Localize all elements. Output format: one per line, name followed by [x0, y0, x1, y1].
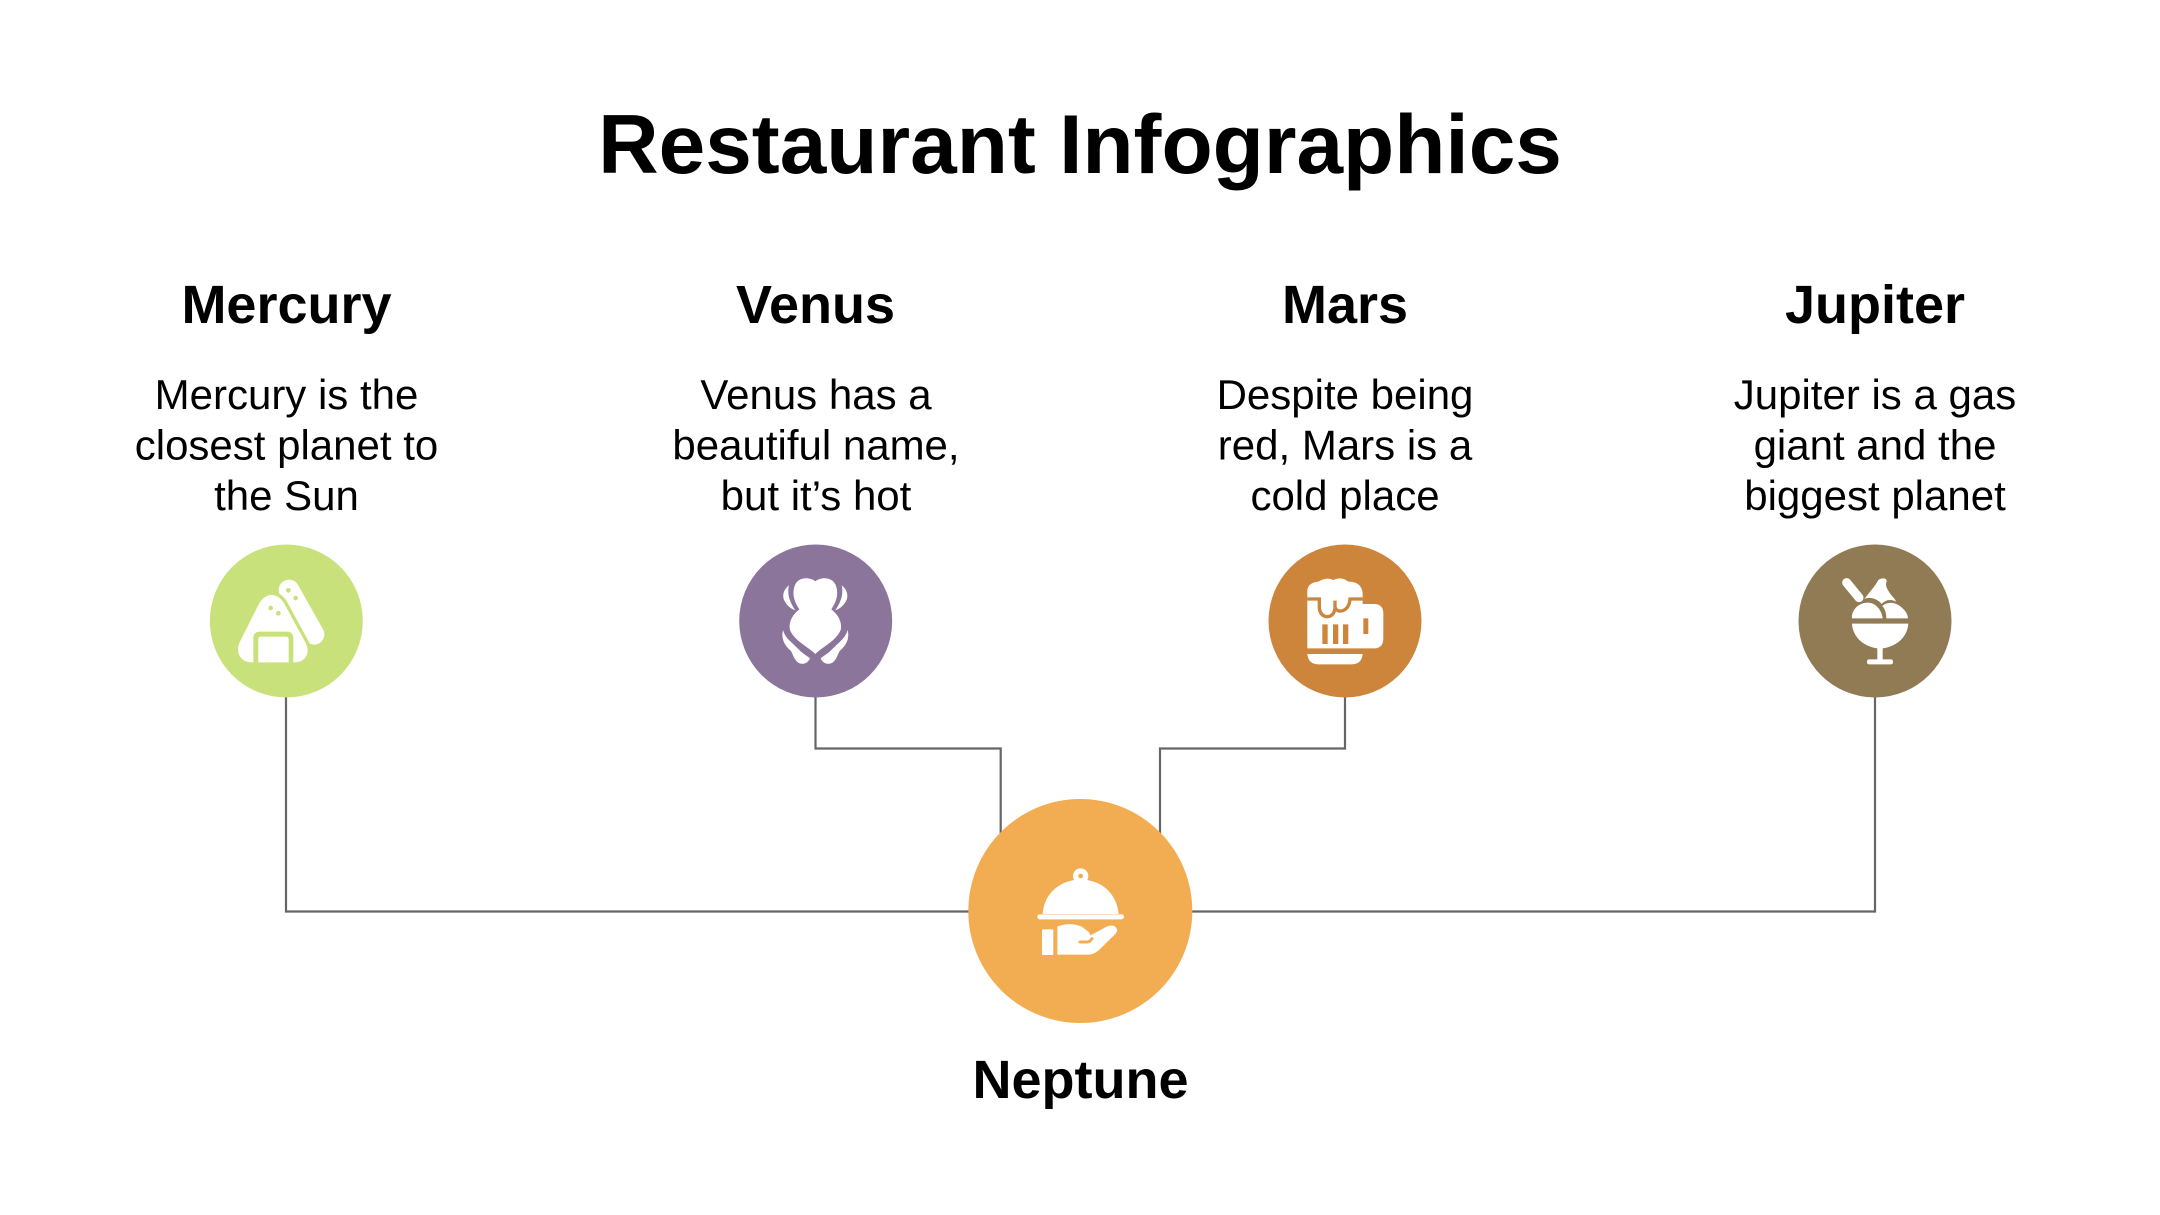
- heading: Venus: Venus: [736, 275, 895, 335]
- text: Mars description: cold place: [1250, 472, 1440, 519]
- text: Mercury description: closest planet to: [135, 421, 438, 468]
- heading: Jupiter: Jupiter: [1785, 275, 1965, 335]
- icon: ice cream sundae: [1798, 544, 1952, 698]
- panel: Mercury: [135, 275, 438, 698]
- panel: Jupiter: [1734, 275, 2016, 698]
- text: Jupiter description: giant and the: [1754, 421, 1996, 468]
- panel: Venus: [672, 275, 960, 698]
- text: Venus description: Venus has a: [700, 371, 932, 418]
- text: Jupiter description: Jupiter is a gas: [1734, 371, 2016, 418]
- heading: Mars: Mars: [1282, 275, 1408, 335]
- icon: serving cloche on hand: [968, 799, 1192, 1023]
- text: Venus description: but it’s hot: [721, 472, 912, 519]
- text: Mercury description: the Sun: [214, 472, 359, 519]
- text: Mars description: Despite being: [1217, 371, 1473, 418]
- icon: rice balls: [210, 544, 363, 698]
- title: Restaurant Infographics: [598, 97, 1562, 191]
- heading: Neptune: Neptune: [972, 1050, 1188, 1110]
- icon: beer mug: [1268, 544, 1422, 698]
- heading: Mercury: Mercury: [181, 275, 392, 335]
- text: Jupiter description: biggest planet: [1744, 472, 2006, 519]
- text: Mars description: red, Mars is a: [1218, 421, 1473, 468]
- text: Mercury description: Mercury is the: [155, 371, 418, 418]
- panel: Mars: [1217, 275, 1473, 698]
- connector lines: [286, 697, 1875, 912]
- text: Venus description: beautiful name,: [672, 421, 960, 468]
- icon: roast chicken: [739, 544, 892, 698]
- panel: Neptune: [968, 799, 1192, 1110]
